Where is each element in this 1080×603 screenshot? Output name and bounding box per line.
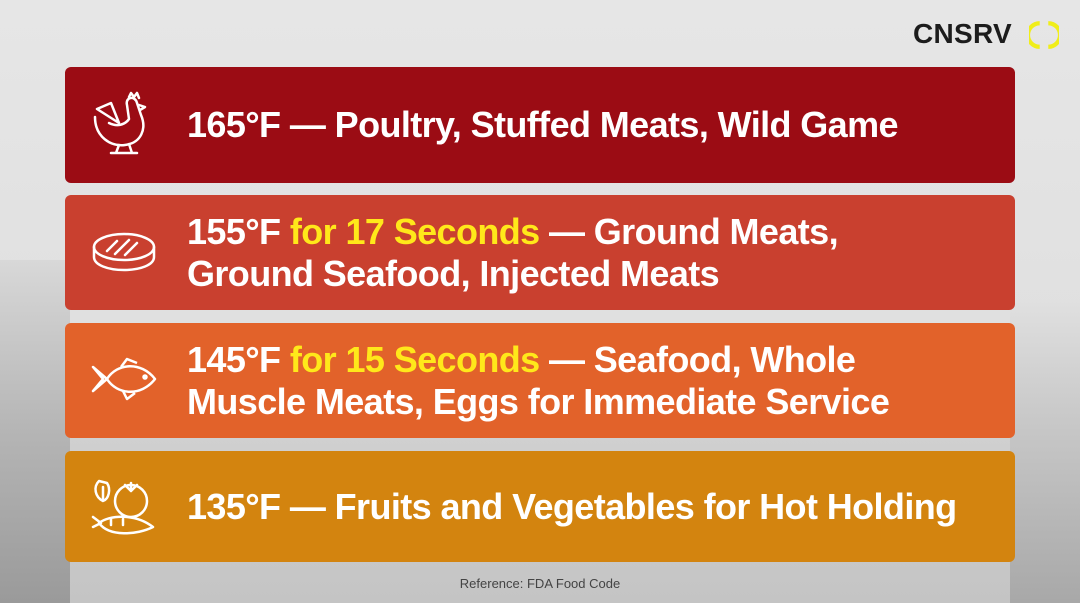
panel: 165F <box>65 67 1015 183</box>
panel: 135F <box>65 451 1015 562</box>
icon: logo ring <box>1029 21 1059 49</box>
panel: 155F <box>65 195 1015 310</box>
footer reference: Reference: FDA Food Code <box>460 576 620 591</box>
icon: vegetables <box>92 480 154 534</box>
panel: 145F <box>65 323 1015 438</box>
text: Ground Seafood, Injected Meats <box>187 253 719 294</box>
text <box>187 339 889 422</box>
text: 165°F — Poultry, Stuffed Meats, Wild Game <box>187 104 898 145</box>
icon: chicken <box>94 92 146 154</box>
text: 145°F for 15 Seconds — Seafood, Whole <box>187 339 855 380</box>
text: 155°F for 17 Seconds — Ground Meats, <box>187 211 838 252</box>
icon: fish <box>92 358 156 400</box>
text: Muscle Meats, Eggs for Immediate Service <box>187 381 889 422</box>
logo <box>913 18 1059 49</box>
text: 135°F — Fruits and Vegetables for Hot Holding <box>187 486 957 527</box>
icon: patty <box>92 232 156 272</box>
text <box>187 211 838 294</box>
logo: CNSRV <box>913 18 1012 49</box>
